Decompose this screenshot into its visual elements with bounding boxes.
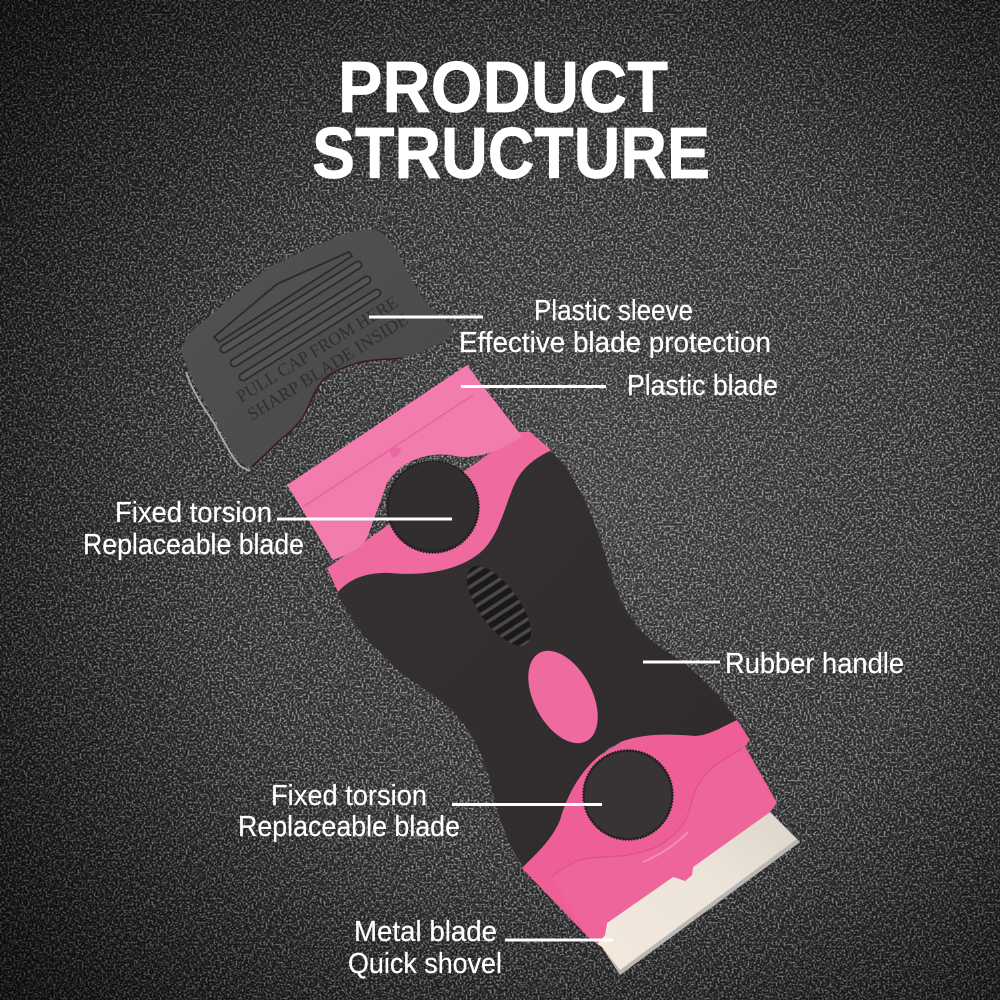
title: STRUCTURE [312, 114, 710, 194]
rubber handle [338, 451, 737, 867]
handle grip ridges [467, 566, 531, 646]
callout: metal blade [348, 916, 613, 980]
top pink blade [287, 365, 522, 560]
scraper tool [287, 365, 800, 975]
callout: top fixed torsion: Replaceable blade [83, 529, 304, 561]
cap grip ridges [214, 252, 377, 377]
pink oval inlay [514, 639, 612, 755]
title: PRODUCT [338, 48, 668, 128]
callout: rubber handle [643, 648, 904, 680]
bottom knurled knob [583, 750, 673, 840]
callout: top fixed torsion [83, 497, 452, 561]
callout: plastic sleeve: Plastic sleeve [534, 295, 693, 327]
plastic sleeve cap [182, 229, 453, 471]
top pink collar [327, 432, 560, 600]
top knurled knob [387, 461, 479, 553]
title [312, 48, 710, 194]
callout: plastic sleeve: Effective blade protection [459, 327, 771, 359]
metal blade [597, 812, 800, 975]
callout: plastic blade [461, 370, 778, 402]
callout: top fixed torsion: Fixed torsion [115, 497, 272, 529]
callout: rubber handle: Rubber handle [725, 648, 904, 680]
embossed cap text: PULL CAP FROM HERE [233, 292, 402, 406]
callout: plastic blade: Plastic blade [627, 370, 778, 402]
callout: bottom fixed torsion [238, 780, 602, 843]
callout: plastic sleeve [369, 295, 771, 359]
bottom pink holder [522, 720, 777, 944]
callout: bottom fixed torsion: Fixed torsion [271, 780, 427, 812]
callout: metal blade: Metal blade [354, 916, 497, 948]
embossed cap text: SHARP BLADE INSIDE [244, 309, 412, 424]
callout: metal blade: Quick shovel [348, 948, 502, 980]
callout: bottom fixed torsion: Replaceable blade [238, 811, 460, 843]
